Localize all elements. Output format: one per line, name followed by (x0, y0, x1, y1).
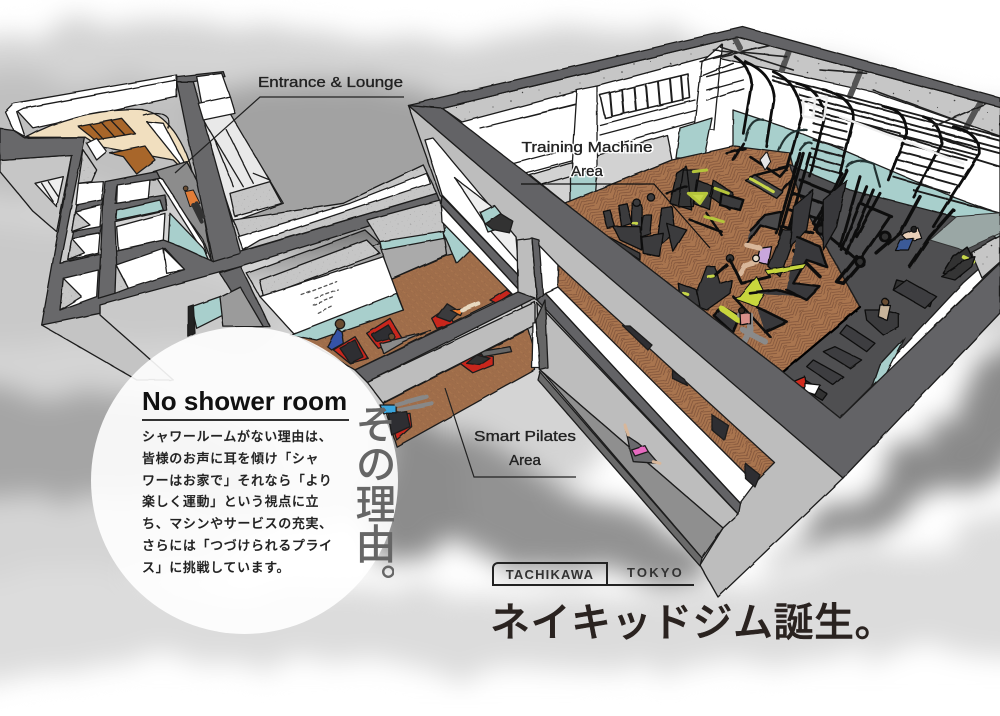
body text: ス」に挑戦しています。 (142, 560, 290, 575)
right room: floors (565, 146, 1000, 418)
machines: near the back corner (603, 194, 700, 307)
climbing frames and stripes on the back wall (700, 43, 1000, 250)
gym machines and people: central floor (667, 167, 975, 400)
panel: no shower room circle (91, 327, 398, 634)
heading: No shower room: No shower room (142, 386, 347, 416)
label: Training Machine Area: Training Machine (522, 139, 652, 156)
left room: interior (247, 200, 518, 370)
label: Smart Pilates Area: Area (509, 452, 541, 469)
body text: ワーはお家で」それなら「より (142, 473, 332, 488)
right room: back walls (442, 35, 1000, 255)
body text: ち、マシンやサービスの充実、 (142, 516, 333, 531)
lower room: interior floor (380, 327, 535, 447)
label: Training Machine Area (521, 139, 710, 248)
label: Training Machine Area: Area (571, 163, 603, 180)
label: Training Machine Area: Area (571, 163, 603, 180)
left building: small rooms (60, 73, 437, 337)
near wall: openings and ledges (408, 27, 1000, 597)
person in lounge (183, 186, 203, 222)
label: Smart Pilates Area: Smart Pilates (474, 428, 576, 445)
label: Training Machine Area: Training Machine (522, 139, 652, 156)
tag box: Tachikawa (492, 562, 608, 586)
main title: ネイキッドジム誕生。 (490, 601, 895, 645)
body text: さらには「つづけられるプライ (142, 538, 333, 553)
red pilates machines (333, 290, 512, 363)
label: Entrance & Lounge (175, 74, 404, 173)
central beam and lower ledge (355, 292, 660, 463)
body text: 楽しく運動」という視点に立 (142, 494, 319, 509)
tag: Tokyo: TOKYO (627, 565, 684, 580)
location tag (492, 562, 694, 586)
label: Smart Pilates Area (445, 388, 576, 477)
body text: 皆様のお声に耳を傾け「シャ (142, 451, 319, 466)
person resting by ropes (895, 226, 922, 250)
label: Entrance & Lounge: Entrance & Lounge (258, 74, 403, 91)
person on bench (793, 377, 807, 388)
tag box: Tachikawa: TACHIKAWA (506, 567, 594, 582)
left building: dark slab and beams (0, 72, 441, 327)
benches (800, 280, 937, 400)
body text (142, 429, 333, 575)
body text: シャワールームがない理由は、 (142, 429, 332, 444)
person stretching (625, 425, 660, 463)
gym machines and people: rear racks (727, 143, 973, 307)
left building: outer faces (0, 77, 283, 380)
